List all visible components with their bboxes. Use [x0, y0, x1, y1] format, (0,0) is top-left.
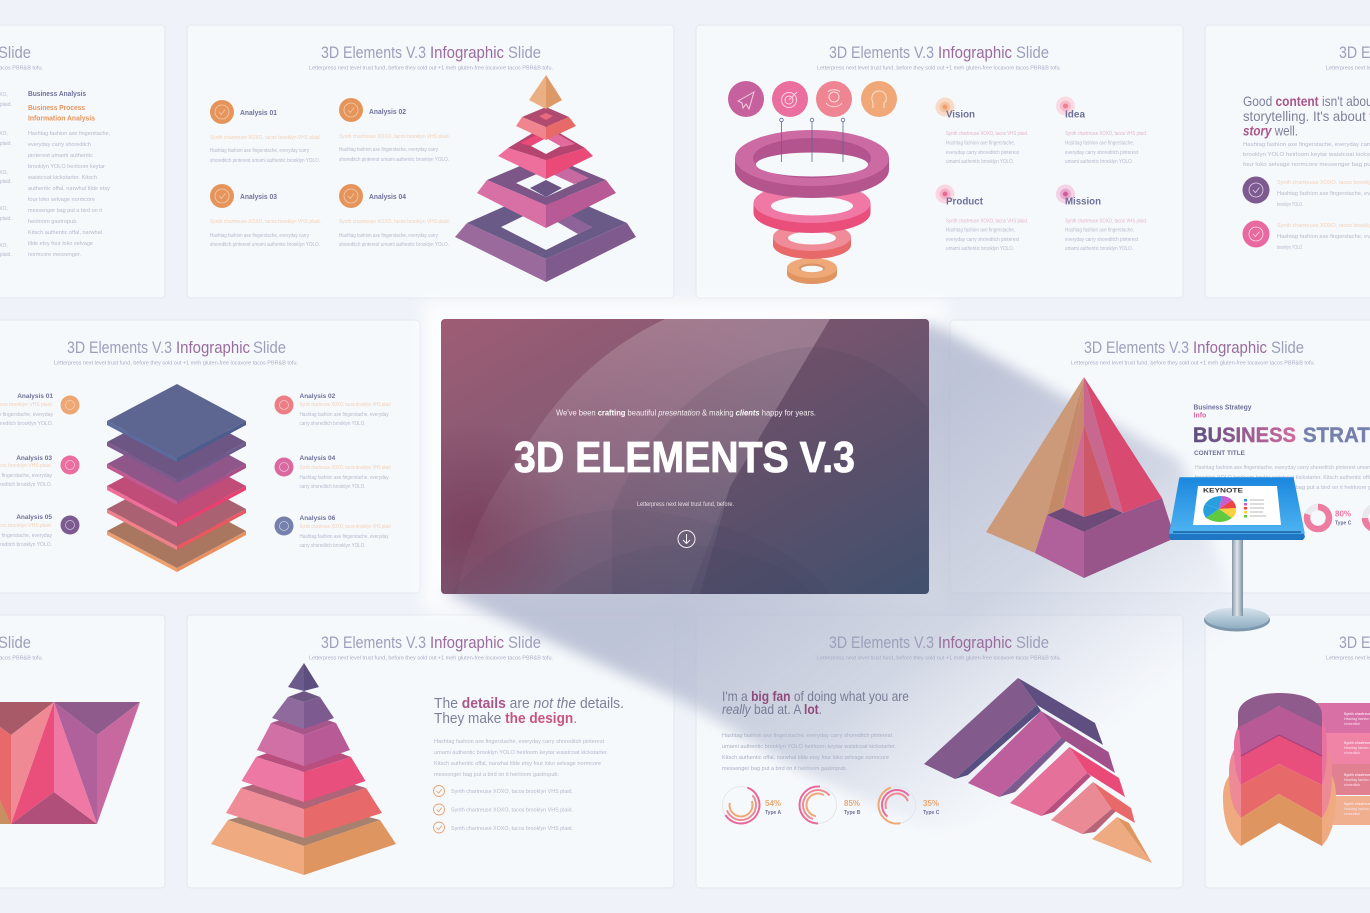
- block: product: umami authentic brooklyn YOLO.: [946, 246, 1014, 252]
- analysis 05: [0, 514, 80, 548]
- block: vision: everyday carry shoreditch pinterest: [946, 150, 1020, 156]
- bottom-left tint: [441, 319, 929, 594]
- title: Slide: [1016, 633, 1049, 652]
- title: 3D Elements V.3: [1084, 338, 1189, 357]
- analysis 03: Hashtag fashion axe fingerstache, everyday carry: [210, 233, 309, 239]
- title: Slide: [508, 43, 541, 62]
- slide background: [441, 319, 929, 594]
- long cast shadow: [443, 322, 1250, 830]
- label bars: shoreditch: [1344, 751, 1360, 755]
- analysis 04: Synth chartreuse XOXO, tacos brooklyn VHS plaid: [300, 465, 391, 471]
- block: idea: Hashtag fashion axe fingerstache,: [1065, 140, 1134, 146]
- folded prism: [0, 702, 140, 824]
- analysis 06: Hashtag fashion axe fingerstache, everyday: [300, 534, 389, 540]
- analysis 02: shoreditch pinterest umami authentic brooklyn YOLO.: [339, 157, 449, 163]
- donut 80%: 80%: [1335, 510, 1351, 518]
- analysis 02: [274, 393, 391, 427]
- block: mission: everyday carry shoreditch pinterest: [1065, 237, 1139, 243]
- business strategy info: [1194, 404, 1252, 420]
- chevron face 2: [1241, 735, 1322, 785]
- body text: tilde etsy four loko selvage: [28, 241, 93, 247]
- body text: Kitsch authentic offal, narwhal tilde etsy four loko selvage normcore: [434, 761, 601, 767]
- title: [1084, 338, 1304, 357]
- title: Slide: [1016, 43, 1049, 62]
- second layer: [516, 107, 576, 140]
- analysis 02: Hashtag fashion axe fingerstache, everyday: [300, 412, 389, 418]
- checklist: Synth chartreuse XOXO, tacos brooklyn VHS plaid.: [451, 808, 573, 814]
- radial chart 54%: 54%: [765, 799, 781, 808]
- left analyses: [0, 393, 80, 548]
- quote: [722, 688, 909, 717]
- analysis 04: [274, 455, 391, 490]
- right analyses: [274, 393, 391, 549]
- panel: funnel slide: [728, 43, 1147, 284]
- donut 80%: Type C: [1335, 520, 1352, 526]
- analysis 04: carry shoreditch brooklyn YOLO.: [300, 484, 366, 490]
- analysis 06: Synth chartreuse XOXO, tacos brooklyn VHS plaid: [300, 524, 391, 530]
- title: 3D Elements V.3: [829, 633, 934, 652]
- big heading: [1193, 424, 1370, 447]
- base tier: [211, 800, 396, 875]
- radial chart 85%: [799, 786, 861, 824]
- title: [829, 633, 1049, 652]
- analysis 01: [0, 393, 80, 427]
- analysis 01: Analysis 01: [240, 108, 277, 117]
- main title: 3D ELEMENTS V.3: [514, 433, 855, 482]
- analysis 02: Synth chartreuse XOXO, tacos brooklyn VHS plaid: [300, 402, 391, 408]
- analysis 04: Hashtag fashion axe fingerstache, everyday carry: [339, 233, 438, 239]
- side fragments: [0, 92, 12, 258]
- panel: analysis pyramid slide: [210, 43, 636, 282]
- analysis 01: Synth chartreuse XOXO, tacos brooklyn VHS plaid.: [210, 135, 321, 141]
- chevron face 3: [1241, 764, 1322, 818]
- third layer: [498, 125, 593, 179]
- donut cut off: [1365, 507, 1370, 529]
- title: Infographic: [938, 633, 1012, 652]
- title: [67, 338, 286, 357]
- icon: gear flower: [816, 81, 852, 117]
- tagline: We've been crafting beautiful presentation & making clients happy for years.: [556, 408, 816, 418]
- quote: really bad at. A lot.: [722, 701, 822, 717]
- block: product: Synth chartreuse XOXO, tacos VHS plaid.: [946, 218, 1028, 224]
- radial chart 54%: Type A: [765, 810, 782, 816]
- content title: CONTENT TITLE: [1194, 450, 1246, 457]
- radial chart 35%: 35%: [923, 799, 939, 808]
- step 3: [1010, 747, 1125, 816]
- tier 2: [272, 691, 334, 729]
- stand pole: [1232, 539, 1243, 616]
- title: 3D Elements V.3: [829, 43, 934, 62]
- ring 2: [754, 183, 870, 233]
- tier 3: [257, 712, 350, 766]
- radial chart 54%: [717, 781, 782, 829]
- icon: keynote podium: [1169, 478, 1305, 632]
- chevron face 1: [1239, 706, 1322, 756]
- title: [321, 633, 541, 652]
- block: product: Hashtag fashion axe fingerstache,: [946, 228, 1015, 234]
- body text: heirloom gastropub.: [28, 219, 78, 225]
- icon: target: [772, 81, 808, 117]
- title: Infographic: [938, 43, 1012, 62]
- fourth layer: [477, 155, 616, 228]
- sub text: Letterpress next level trust fund, before.: [637, 502, 734, 508]
- analysis 05: Analysis 05: [16, 514, 52, 521]
- tier 5: [226, 770, 382, 838]
- podium lip: [1173, 531, 1301, 533]
- block: mission: Hashtag fashion axe fingerstache,: [1065, 228, 1134, 234]
- item with check icon pink: [1242, 220, 1370, 251]
- analysis 01: [210, 100, 321, 164]
- title: Infographic: [430, 633, 504, 652]
- analysis 02: [339, 98, 450, 163]
- ring 3: [773, 223, 851, 259]
- block: idea: [1056, 96, 1147, 165]
- title: Infographic: [430, 43, 504, 62]
- big heading: BUSINESS: [1193, 424, 1296, 447]
- stepped wedge chart: [924, 678, 1152, 863]
- subtitle: Letterpress next level trust fund, before they sold out +1 meh gluten-free locavore tacos PBR&B tofu.: [1071, 360, 1315, 366]
- podium board: [1170, 478, 1304, 533]
- glow around centre slide: [425, 303, 945, 610]
- block: idea: umami authentic brooklyn YOLO.: [1065, 159, 1133, 165]
- quote: [1243, 93, 1370, 138]
- title: 3D Elements V.3: [321, 633, 426, 652]
- donut 80%: [1307, 507, 1352, 529]
- title: 3D Elements V.3: [321, 43, 426, 62]
- analysis 01: Hashtag fashion axe fingerstache, everyday carry: [210, 148, 309, 154]
- funnel rings chart: [735, 118, 889, 284]
- title: Infographic: [1193, 338, 1267, 357]
- quote: story well.: [1243, 122, 1298, 138]
- label bars: Hashtag fashion: [1344, 807, 1369, 811]
- body text: pinterest umami authentic: [28, 153, 94, 159]
- block: product: everyday carry shoreditch pinterest: [946, 237, 1020, 243]
- tiered pyramid chart: [211, 663, 396, 875]
- analysis 04: Analysis 04: [300, 455, 336, 462]
- title: 3D Elements V.3: [67, 338, 172, 357]
- title: Slide: [253, 338, 286, 357]
- block: vision: [936, 98, 1028, 165]
- title: Slide: [508, 633, 541, 652]
- body text: Hashtag fashion axe fingerstache, everyday carry shoreditch pinterest: [722, 733, 893, 739]
- business strategy info: Info: [1194, 412, 1206, 420]
- chevron stack chart: [1223, 693, 1336, 846]
- panel: big fan slide: [717, 633, 1152, 863]
- body text: messenger bag put a bird on it heirloom gastropub.: [722, 766, 847, 772]
- heading: business analysis: Business Analysis: [28, 91, 86, 98]
- checklist: [434, 786, 573, 833]
- step 4: [1051, 782, 1135, 834]
- ring 4: [787, 258, 837, 284]
- tier 4: [242, 740, 366, 802]
- analysis 02: Analysis 02: [300, 393, 336, 400]
- chevron rims: [1241, 735, 1322, 756]
- body text: Kitsch authentic offal, narwhal: [28, 230, 102, 236]
- stacked layers chart: [107, 384, 246, 572]
- radial chart 85%: 85%: [844, 799, 860, 808]
- radial chart 35%: [876, 784, 940, 826]
- panel: left partial slide bottom row: [0, 633, 140, 824]
- body text: authentic offal, narwhal tilde etsy: [28, 186, 111, 192]
- body text: four loko selvage normcore messenger bag put a bird on it: [1243, 162, 1370, 168]
- top tip: [529, 75, 562, 109]
- block: mission: Mission: [1065, 196, 1101, 208]
- body text: Hashtag fashion axe fingerstache,: [28, 131, 110, 137]
- block: vision: Synth chartreuse XOXO, tacos VHS plaid.: [946, 131, 1028, 137]
- analysis 03: Analysis 03: [240, 192, 277, 201]
- quote: The details are not the details.: [434, 696, 624, 712]
- block: vision: umami authentic brooklyn YOLO.: [946, 159, 1014, 165]
- step 2: [968, 711, 1115, 797]
- body text: [1195, 465, 1370, 491]
- block: idea: Synth chartreuse XOXO, tacos VHS plaid.: [1065, 131, 1147, 137]
- analysis 06: Analysis 06: [300, 515, 336, 522]
- analysis 03: Analysis 03: [16, 455, 52, 462]
- body text: [28, 131, 111, 258]
- body text: umami authentic brooklyn YOLO heirloom keytar waistcoat kickstarter.: [434, 750, 608, 756]
- icon: down arrow: [678, 530, 695, 548]
- body text: everyday carry shoreditch: [28, 142, 91, 148]
- icon: head: [861, 81, 897, 117]
- body text: Hashtag fashion axe fingerstache, everyday carry shoreditch pinterest: [434, 739, 605, 745]
- overlapping curved shapes: [450, 319, 929, 594]
- body text: waistcoat kickstarter. Kitsch: [28, 175, 97, 181]
- panel: centre title slide: [441, 319, 929, 594]
- label bars: [1315, 703, 1370, 825]
- radial chart 35%: Type C: [923, 810, 940, 816]
- analysis 03: [0, 455, 80, 488]
- title: Slide: [1271, 338, 1304, 357]
- panel: stacked layers slide: [0, 338, 391, 572]
- analysis 06: [274, 515, 391, 549]
- item with check icon purple: brooklyn YOLO.: [1277, 202, 1303, 208]
- label bars: shoreditch: [1344, 722, 1360, 726]
- pie legend: [1244, 499, 1266, 518]
- quote: They make the design.: [434, 711, 577, 727]
- heading: business process: Business Process: [28, 105, 85, 112]
- heading: business process: Information Analysis: [28, 116, 95, 122]
- connector arrows: [780, 118, 845, 162]
- subtitle: Letterpress next level trust fund, before they sold out +1 meh gluten-free locavore tacos PBR&B tofu.: [54, 360, 298, 366]
- subtitle: Letterpress next level trust fund, before they sold out +1 meh gluten-free locavore tacos PBR&B tofu.: [817, 66, 1061, 72]
- label bars: Hashtag fashion: [1344, 746, 1369, 750]
- panel: business strategy slide: [986, 338, 1370, 578]
- subtitle: Letterpress next level trust fund, before they sold out +1 meh gluten-free locavore tacos PBR&B tofu.: [309, 656, 553, 662]
- quote: I'm a big fan of doing what you are: [722, 688, 909, 704]
- body text: messenger bag put a bird on it: [28, 208, 103, 214]
- pie chart: [1203, 496, 1236, 522]
- icon: paper plane: [728, 81, 764, 117]
- block: product: Product: [946, 196, 983, 208]
- body text: [434, 739, 608, 778]
- business strategy info: Business Strategy: [1194, 404, 1252, 412]
- heading: business process: [28, 105, 95, 122]
- analysis 01: shoreditch pinterest umami authentic brooklyn YOLO.: [210, 158, 320, 164]
- analysis 01: Analysis 01: [17, 393, 53, 400]
- ring 1: [735, 130, 889, 198]
- block: idea: Idea: [1065, 108, 1085, 120]
- body text: umami authentic brooklyn YOLO heirloom keytar waistcoat kickstarter.: [722, 744, 896, 750]
- item with check icon pink: brooklyn YOLO.: [1277, 245, 1303, 251]
- keynote label: KEYNOTE: [1203, 488, 1244, 494]
- panel: tiered pyramid slide: [211, 633, 624, 875]
- subtitle: Letterpress next level trust fund, before they sold out +1 meh gluten-free locavore tacos PBR&B tofu.: [817, 656, 1061, 662]
- analysis 04: [339, 184, 450, 248]
- checklist: Synth chartreuse XOXO, tacos brooklyn VHS plaid.: [451, 826, 573, 832]
- podium underside: [1169, 533, 1305, 540]
- analysis 02: Synth chartreuse XOXO, tacos brooklyn VHS plaid.: [339, 134, 450, 140]
- block: idea: everyday carry shoreditch pinterest: [1065, 150, 1139, 156]
- tip: [288, 663, 319, 691]
- stand base: [1204, 608, 1270, 632]
- analysis 02: Hashtag fashion axe fingerstache, everyday carry: [339, 147, 438, 153]
- analysis 02: Analysis 02: [369, 107, 406, 116]
- block: vision: Vision: [946, 108, 975, 120]
- label bars: shoreditch: [1344, 783, 1360, 787]
- analysis 06: carry shoreditch brooklyn YOLO.: [300, 543, 366, 549]
- analysis 03: shoreditch pinterest umami authentic brooklyn YOLO.: [210, 242, 320, 248]
- chevron face 4: [1241, 794, 1322, 846]
- paper: [1193, 486, 1281, 525]
- label bars: Hashtag fashion: [1344, 717, 1369, 721]
- coral bulges: [1229, 742, 1332, 818]
- block: mission: [1056, 184, 1147, 252]
- body text: [1243, 142, 1370, 168]
- block: mission: Synth chartreuse XOXO, tacos VHS plaid.: [1065, 218, 1147, 224]
- label bars: Hashtag fashion: [1344, 778, 1369, 782]
- title: Infographic: [176, 338, 250, 357]
- block: vision: Hashtag fashion axe fingerstache,: [946, 140, 1015, 146]
- body text: Kitsch authentic offal, narwhal tilde etsy four loko selvage normcore: [722, 755, 889, 761]
- analysis 02: carry shoreditch brooklyn YOLO.: [300, 421, 366, 427]
- step 5: [1092, 817, 1152, 863]
- body text: four loko selvage normcore messenger bag put a bird on it heirloom gastropub.: [1195, 485, 1370, 491]
- analysis 04: shoreditch pinterest umami authentic brooklyn YOLO.: [339, 242, 449, 248]
- split pyramid: [986, 377, 1175, 578]
- top cap: [1238, 693, 1322, 730]
- radial chart 85%: Type B: [844, 810, 861, 816]
- block: product: [936, 184, 1028, 252]
- checklist: Synth chartreuse XOXO, tacos brooklyn VHS plaid.: [451, 789, 573, 795]
- pink bulges: [1234, 722, 1327, 785]
- body text: messenger bag put a bird on it heirloom gastropub.: [434, 772, 559, 778]
- body text: four loko selvage normcore: [28, 197, 95, 203]
- analysis 04: Synth chartreuse XOXO, tacos brooklyn VHS plaid.: [339, 219, 450, 225]
- item with check icon purple: [1242, 176, 1370, 208]
- panel: right partial slide top row: [1242, 43, 1370, 251]
- body text: brooklyn YOLO heirloom keytar: [28, 164, 105, 170]
- body text: [722, 733, 896, 772]
- orange bulges: [1223, 765, 1336, 846]
- title: [829, 43, 1049, 62]
- subtitle: Letterpress next level trust fund, before they sold out +1 meh gluten-free locavore tacos PBR&B tofu.: [309, 66, 553, 72]
- analysis 04: Analysis 04: [369, 192, 407, 201]
- label bars: shoreditch: [1344, 812, 1360, 816]
- body text: normcore messenger.: [28, 252, 81, 258]
- analysis 04: Hashtag fashion axe fingerstache, everyday: [300, 475, 389, 481]
- exploded pyramid chart: [455, 75, 636, 282]
- quote: [434, 696, 624, 727]
- block: mission: umami authentic brooklyn YOLO.: [1065, 246, 1133, 252]
- panel: right partial slide bottom row: [1223, 633, 1370, 846]
- step 1: [924, 678, 1103, 779]
- panel: left partial slide top row: [0, 43, 111, 258]
- analysis 03: Synth chartreuse XOXO, tacos brooklyn VHS plaid.: [210, 219, 321, 225]
- analysis 03: [210, 184, 321, 248]
- bottom layer: [455, 188, 636, 282]
- title: [321, 43, 541, 62]
